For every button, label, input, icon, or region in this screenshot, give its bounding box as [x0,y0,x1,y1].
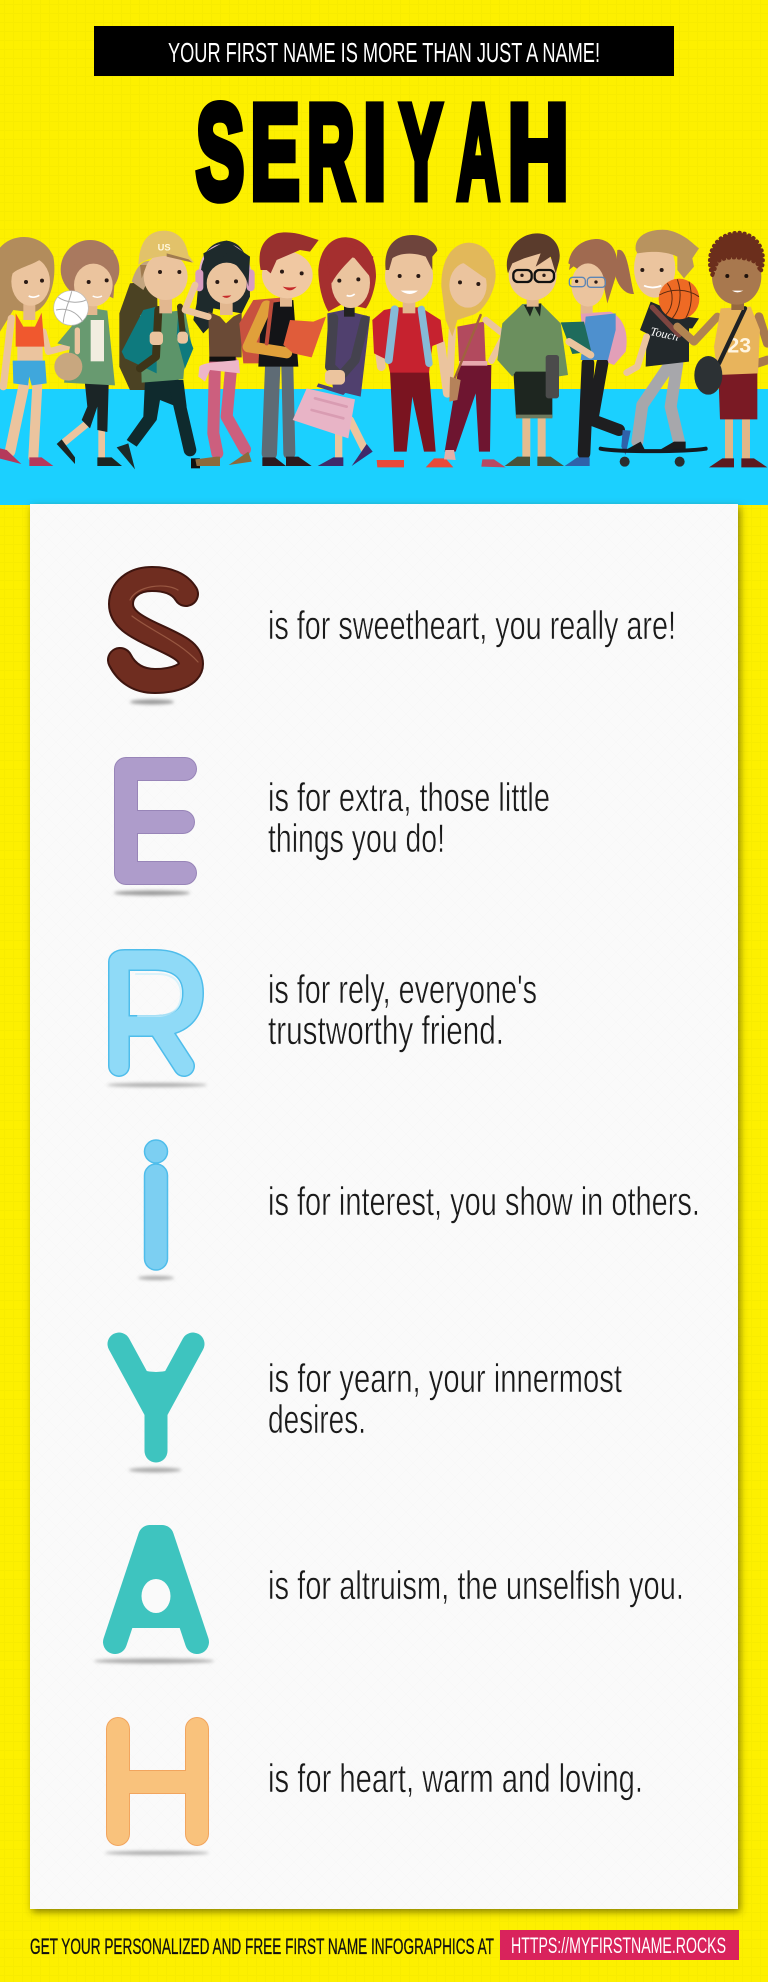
student 8 blonde [441,243,506,467]
student 3 with cap and backpack: US [158,243,171,253]
illustration: group of students [0,230,767,469]
row: letter E: things you do! [268,817,445,861]
row: letter R [107,960,537,1087]
row: letter I [138,1140,700,1280]
left half of the group [0,231,376,469]
icon: letter Y [119,1344,193,1451]
row: letter H [105,1729,643,1855]
student 12 with tank top [694,233,767,467]
title: name: E [250,77,300,227]
panel: letters and meanings [30,504,738,1909]
title: name: Y [400,78,442,227]
title: name [196,76,569,227]
row: letter E [114,769,550,896]
text: Y meaning: is for yearn, your innermost [268,1357,622,1401]
row: letter A [94,1530,684,1664]
student 1 [0,237,77,466]
icon: letter S [120,579,198,681]
row: letter Y: desires. [268,1398,366,1442]
footer call to action: GET YOUR PERSONALIZED AND FREE FIRST NAME INFOGRAPHICS AT [30,1934,494,1959]
header banner [94,26,674,76]
student 6 with pink bag [293,237,376,466]
icon: letter i [144,1140,168,1270]
student 12 with tank top: 23 [727,334,751,358]
icon: letter H [118,1729,197,1834]
student 11 skateboarder with basketball: Touch [649,324,680,344]
text: R meaning: is for rely, everyone's [268,968,537,1012]
blue floor band [0,389,768,505]
student 11 skateboarder with basketball [601,230,717,467]
icon: letter E [126,769,185,873]
student 10 with tablet [561,239,634,466]
student 2 with volleyball [54,240,122,466]
student 5 with book [239,232,326,466]
student 7 with red shirt [372,235,453,467]
student 9 with glasses [497,233,568,466]
title: name: R [307,77,354,227]
text: E meaning: is for extra, those little [268,776,550,820]
row: letter R: trustworthy friend. [268,1009,504,1053]
row: letter Y [119,1344,622,1472]
icon: letter R [119,960,193,1066]
student 3 with cap and backpack [117,231,200,469]
title: name: I [363,77,386,227]
title: name: A [457,76,500,226]
icon: letter A [115,1530,197,1642]
row: letter S [120,579,676,704]
text: H meaning: is for heart, warm and loving. [268,1757,643,1801]
right half of the group [372,230,767,467]
student 4 with headphones [185,241,255,466]
footer [30,1930,739,1960]
title: name: H [508,77,569,227]
title: name: S [196,77,244,227]
